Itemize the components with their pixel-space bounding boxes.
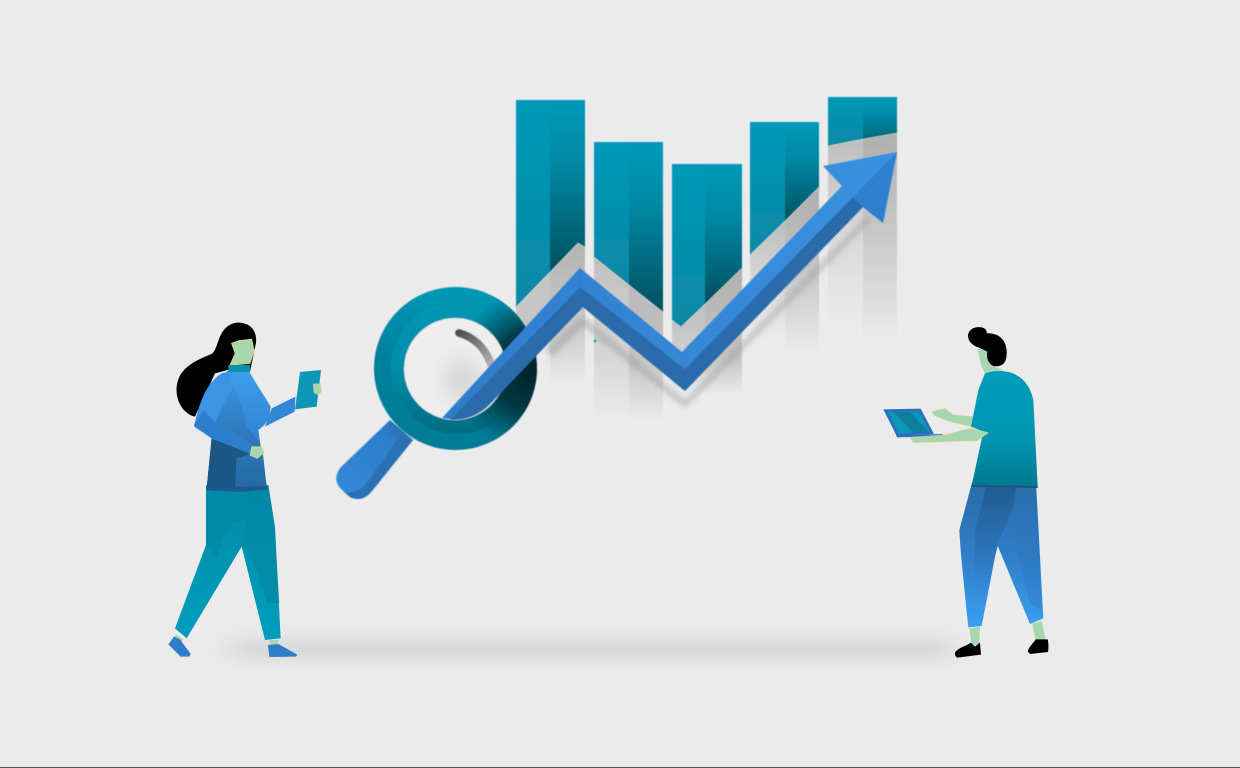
person: woman with tablet [168, 323, 321, 657]
near arm [910, 428, 989, 443]
lens [403, 317, 507, 421]
hair [177, 323, 256, 417]
bar reflections and grey shadow band [516, 133, 897, 422]
t-shirt [971, 371, 1038, 487]
magnifying glass [336, 287, 537, 499]
ground shadow [212, 639, 972, 659]
person: man with laptop [883, 327, 1048, 658]
handle [336, 420, 413, 499]
hair [968, 327, 1007, 366]
bar 5 [828, 97, 897, 146]
far arm [932, 408, 974, 427]
bar chart [516, 97, 897, 327]
arrow dark underside [450, 197, 863, 420]
arrow shadow [545, 215, 870, 408]
trousers [959, 483, 1043, 627]
arrow head facet [853, 152, 897, 223]
face [230, 339, 254, 365]
bar 4 [750, 122, 819, 255]
sweater [194, 365, 295, 492]
shoes [955, 639, 1048, 658]
bottom edge line [0, 767, 1240, 768]
bar 2 [594, 142, 663, 312]
lens ring [374, 287, 537, 450]
bar 3 [672, 164, 742, 327]
tablet [295, 370, 321, 409]
bar 1 [516, 100, 585, 307]
socks and shoes [168, 634, 297, 657]
rising arrow [442, 152, 897, 420]
hand [250, 447, 264, 458]
trousers [175, 485, 281, 640]
laptop [883, 409, 943, 437]
waist line [972, 485, 1038, 488]
dot [594, 340, 596, 342]
legs [969, 621, 1045, 645]
arrow body [442, 152, 897, 419]
face and neck [977, 349, 1004, 374]
